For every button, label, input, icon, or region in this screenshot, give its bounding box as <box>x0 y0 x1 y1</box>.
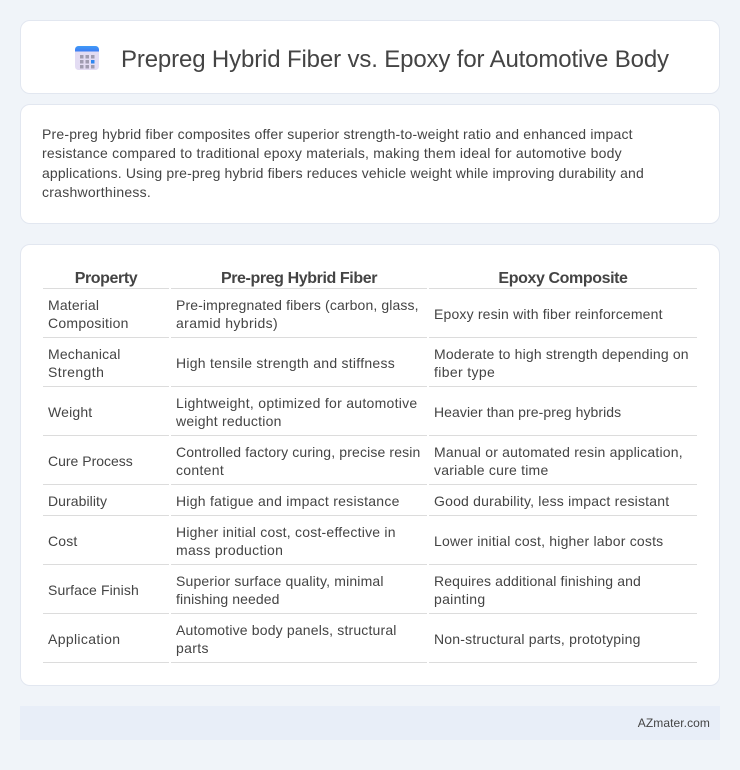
row: weight: Weight <box>48 404 92 420</box>
row: surface finish: finishing needed <box>176 591 280 607</box>
row: cure process <box>48 444 683 478</box>
intro text panel <box>20 104 720 224</box>
row: cure process: Manual or automated resin application, <box>434 444 683 460</box>
row: weight: weight reduction <box>176 413 282 429</box>
row: durability: High fatigue and impact resistance <box>176 493 400 509</box>
row: weight <box>48 395 621 429</box>
intro paragraph: applications. Using pre-preg hybrid fibers reduces vehicle weight while improving durability and <box>42 165 644 181</box>
row: mechanical strength: Moderate to high strength depending on <box>434 346 689 362</box>
row: mechanical strength: Strength <box>48 364 104 380</box>
row: material composition: Material <box>48 297 99 313</box>
intro paragraph: resistance compared to traditional epoxy materials, making them ideal for automotive body <box>42 145 622 161</box>
intro paragraph: Pre-preg hybrid fiber composites offer superior strength-to-weight ratio and enhanced impact <box>42 126 633 142</box>
row: durability: Good durability, less impact resistant <box>434 493 669 509</box>
row: cost: Cost <box>48 533 77 549</box>
row: material composition: Epoxy resin with fiber reinforcement <box>434 306 663 322</box>
row: surface finish: Surface Finish <box>48 582 139 598</box>
header panel <box>20 20 720 94</box>
row: durability <box>48 493 670 509</box>
row: cure process: Controlled factory curing, precise resin <box>176 444 420 460</box>
row: weight: Lightweight, optimized for automotive <box>176 395 417 411</box>
row: cost: Higher initial cost, cost-effective in <box>176 524 396 540</box>
row: surface finish <box>48 573 641 607</box>
row: application <box>48 622 641 656</box>
icon: calendar grid <box>75 46 99 70</box>
row: mechanical strength <box>48 346 689 380</box>
table rules <box>43 288 697 663</box>
row: durability: Durability <box>48 493 107 509</box>
comparison table panel <box>20 244 720 686</box>
row: material composition <box>48 297 663 331</box>
row: mechanical strength: fiber type <box>434 364 495 380</box>
row: application: parts <box>176 640 209 656</box>
row: cure process: variable cure time <box>434 462 548 478</box>
intro paragraph: crashworthiness. <box>42 184 151 200</box>
row: weight: Heavier than pre-preg hybrids <box>434 404 621 420</box>
row: application: Automotive body panels, structural <box>176 622 397 638</box>
row: cost: Lower initial cost, higher labor costs <box>434 533 663 549</box>
title: Prepreg Hybrid Fiber vs. Epoxy for Automotive Body <box>121 46 669 72</box>
table header row: Property <box>75 270 137 287</box>
table header row <box>75 270 628 287</box>
table header row: Pre-preg Hybrid Fiber <box>221 270 377 287</box>
row: material composition: aramid hybrids) <box>176 315 278 331</box>
footer source: AZmater.com <box>638 716 710 730</box>
intro paragraph <box>42 126 644 200</box>
row: surface finish: Requires additional finishing and <box>434 573 641 589</box>
row: cost: mass production <box>176 542 283 558</box>
row: application: Application <box>48 631 120 647</box>
row: application: Non-structural parts, prototyping <box>434 631 641 647</box>
row: surface finish: Superior surface quality, minimal <box>176 573 384 589</box>
row: surface finish: painting <box>434 591 485 607</box>
row: cure process: Cure Process <box>48 453 133 469</box>
row: cure process: content <box>176 462 224 478</box>
footer bar <box>20 706 720 740</box>
row: mechanical strength: High tensile strength and stiffness <box>176 355 395 371</box>
row: material composition: Pre-impregnated fibers (carbon, glass, <box>176 297 419 313</box>
row: cost <box>48 524 663 558</box>
row: material composition: Composition <box>48 315 129 331</box>
row: mechanical strength: Mechanical <box>48 346 121 362</box>
table header row: Epoxy Composite <box>498 270 628 287</box>
